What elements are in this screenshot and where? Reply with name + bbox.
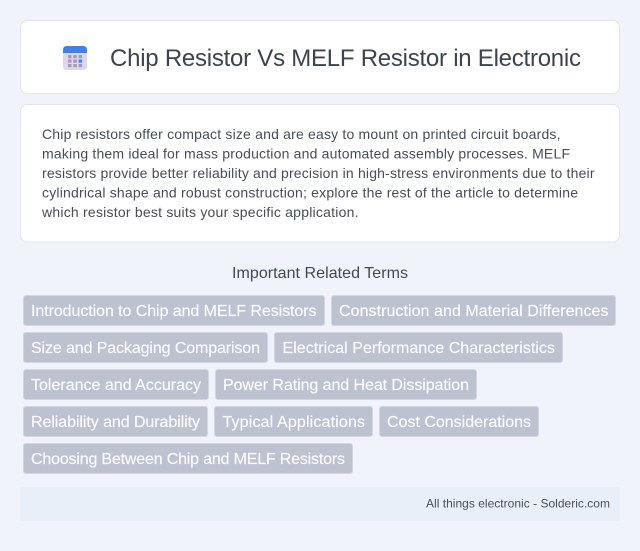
- text block: description: making them ideal for mass production and automated assembly processes. MELF: [42, 146, 570, 162]
- tag: introduction: [24, 296, 324, 326]
- tag: electrical: Electrical Performance Characteristics: [282, 340, 555, 357]
- tag: applications: [214, 406, 372, 436]
- tag: construction: Construction and Material Differences: [339, 303, 608, 320]
- tag: size: Size and Packaging Comparison: [31, 340, 260, 357]
- tag: construction: [332, 296, 616, 326]
- panel: description card: [20, 104, 620, 242]
- tag list: related terms: [24, 296, 616, 474]
- tag: choosing: Choosing Between Chip and MELF Resistors: [31, 451, 345, 468]
- tag: cost: [380, 406, 538, 436]
- text block: description: [41, 126, 595, 220]
- text block: description: Chip resistors offer compact size and are easy to mount on printed circuit boards,: [42, 126, 560, 142]
- title: Chip Resistor Vs MELF Resistor in Electronic: [110, 45, 581, 72]
- tag: introduction: Introduction to Chip and MELF Resistors: [31, 303, 316, 320]
- tag: reliability: [24, 406, 208, 436]
- text block: description: cylindrical shape and robust construction; explore the rest of the article to determine: [42, 184, 578, 200]
- tag: reliability: Reliability and Durability: [31, 414, 200, 431]
- tag: cost: Cost Considerations: [387, 414, 531, 431]
- tag: power: [216, 370, 476, 400]
- tag: tolerance: Tolerance and Accuracy: [31, 377, 201, 394]
- text block: description: resistors provide better reliability and precision in high-stress environments due to their: [42, 165, 595, 181]
- tag: electrical: [274, 332, 562, 362]
- icon: calendar grid: [63, 46, 87, 70]
- heading: related terms: Important Related Terms: [232, 265, 408, 282]
- panel: header card: [20, 20, 620, 94]
- tag: power: Power Rating and Heat Dissipation: [223, 377, 469, 394]
- footer bar: [20, 487, 620, 521]
- text block: description: which resistor best suits your specific application.: [41, 204, 358, 220]
- tag: size: [24, 332, 268, 362]
- tag: tolerance: [24, 370, 208, 400]
- tag: choosing: [24, 444, 352, 474]
- footer text: All things electronic - Solderic.com: [426, 496, 610, 510]
- tag: applications: Typical Applications: [222, 414, 365, 431]
